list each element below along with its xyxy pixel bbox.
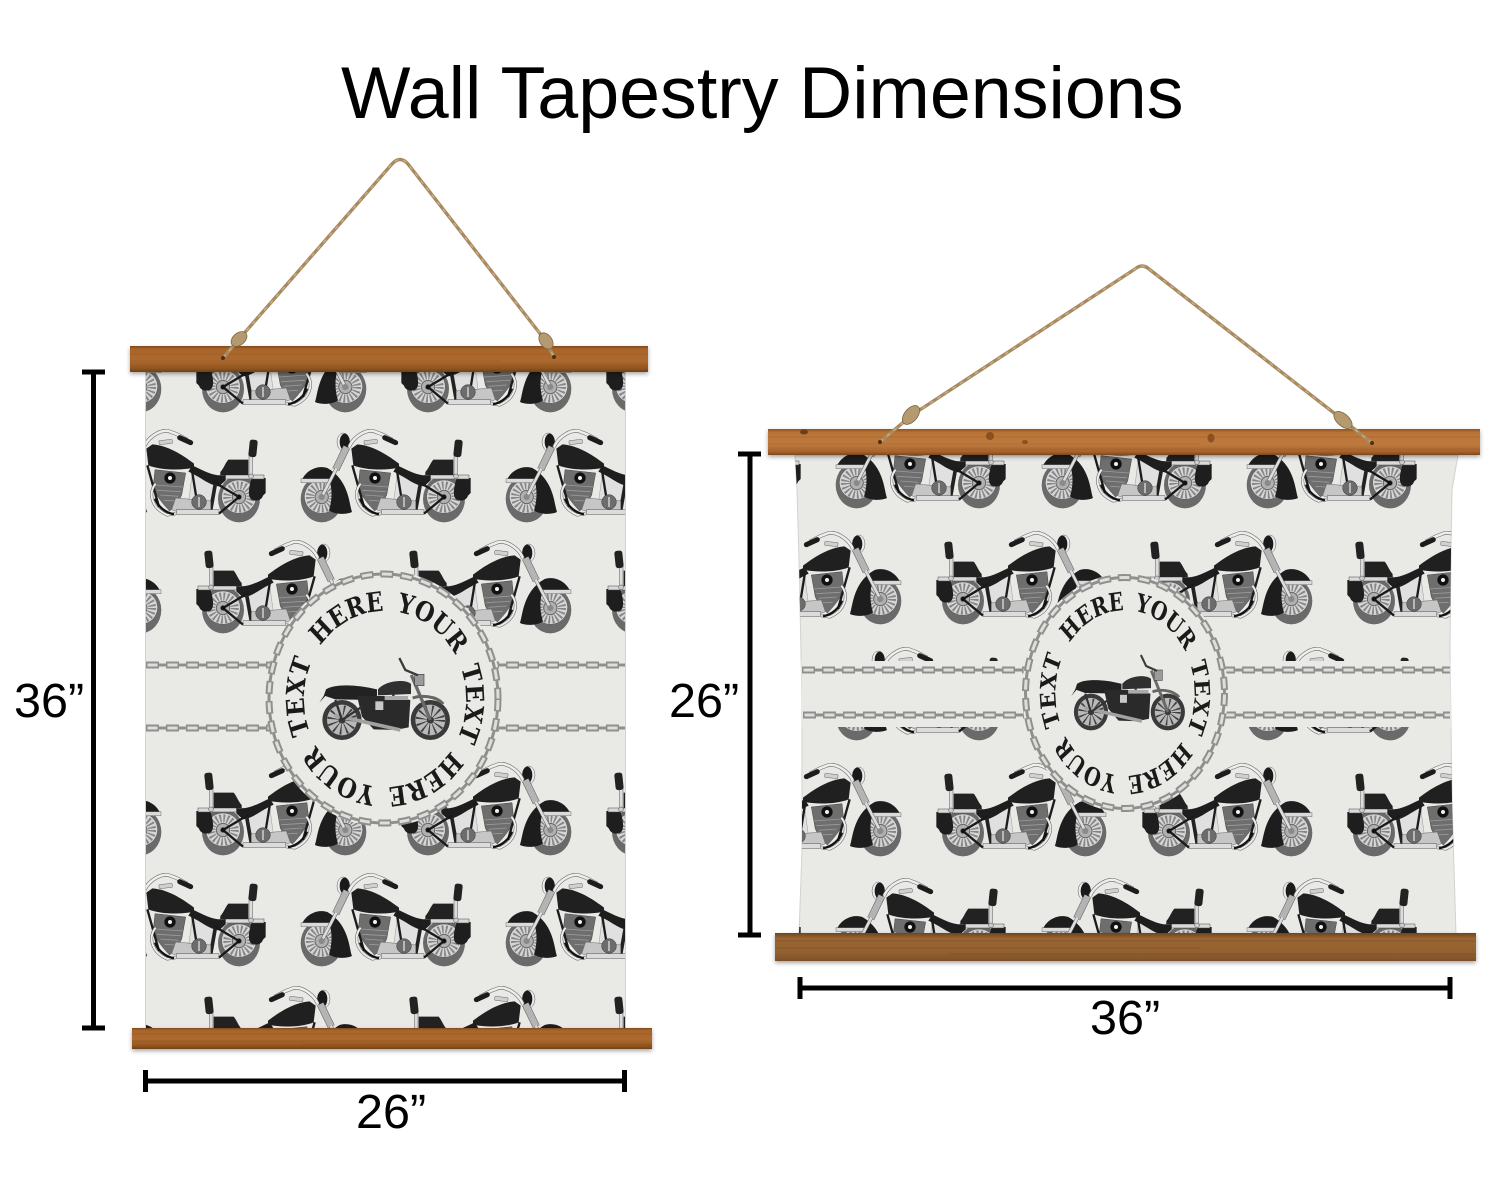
ring text: portrait: HERE YOUR TEXT HERE YOUR TEXT bbox=[286, 591, 484, 807]
center motorcycle: portrait bbox=[319, 658, 450, 740]
ring text: landscape: HERE YOUR TEXT HERE YOUR TEXT bbox=[1040, 592, 1210, 794]
title: Wall Tapestry Dimensions bbox=[341, 51, 1184, 134]
medallion: landscape bbox=[1022, 574, 1228, 812]
motorcycle pattern: portrait bbox=[0, 321, 776, 1079]
top rod: landscape bbox=[768, 429, 1480, 455]
motorcycle pattern: landscape bbox=[631, 417, 1500, 971]
medallion: portrait bbox=[266, 570, 502, 826]
center motorcycle: landscape bbox=[1071, 655, 1185, 730]
label: 26 inches width: 26” bbox=[356, 1085, 426, 1139]
dimension: portrait width 26 bbox=[146, 1070, 624, 1139]
bottom rod: portrait bbox=[132, 1028, 652, 1049]
dimension: landscape width 36 bbox=[800, 977, 1450, 1045]
label: 26 inches height: 26” bbox=[669, 674, 739, 728]
dimension: portrait height 36 bbox=[14, 372, 105, 1028]
label: 36 inches height: 36” bbox=[14, 674, 84, 728]
chains: landscape horizontal bbox=[802, 670, 1450, 715]
fabric: portrait bbox=[146, 372, 626, 1030]
hanging rope: landscape bbox=[878, 266, 1374, 445]
label: 36 inches width: 36” bbox=[1090, 991, 1160, 1045]
top rod: portrait bbox=[130, 346, 648, 372]
panel: landscape tapestry 36 by 26 bbox=[765, 264, 1483, 966]
chains: portrait horizontal bbox=[146, 665, 625, 728]
dimension: landscape height 26 bbox=[669, 454, 761, 935]
hanging rope: portrait bbox=[221, 160, 556, 360]
fabric: landscape bbox=[795, 455, 1458, 935]
bottom rod: landscape bbox=[775, 933, 1476, 961]
panel: portrait tapestry 26 by 36 bbox=[127, 158, 655, 1054]
